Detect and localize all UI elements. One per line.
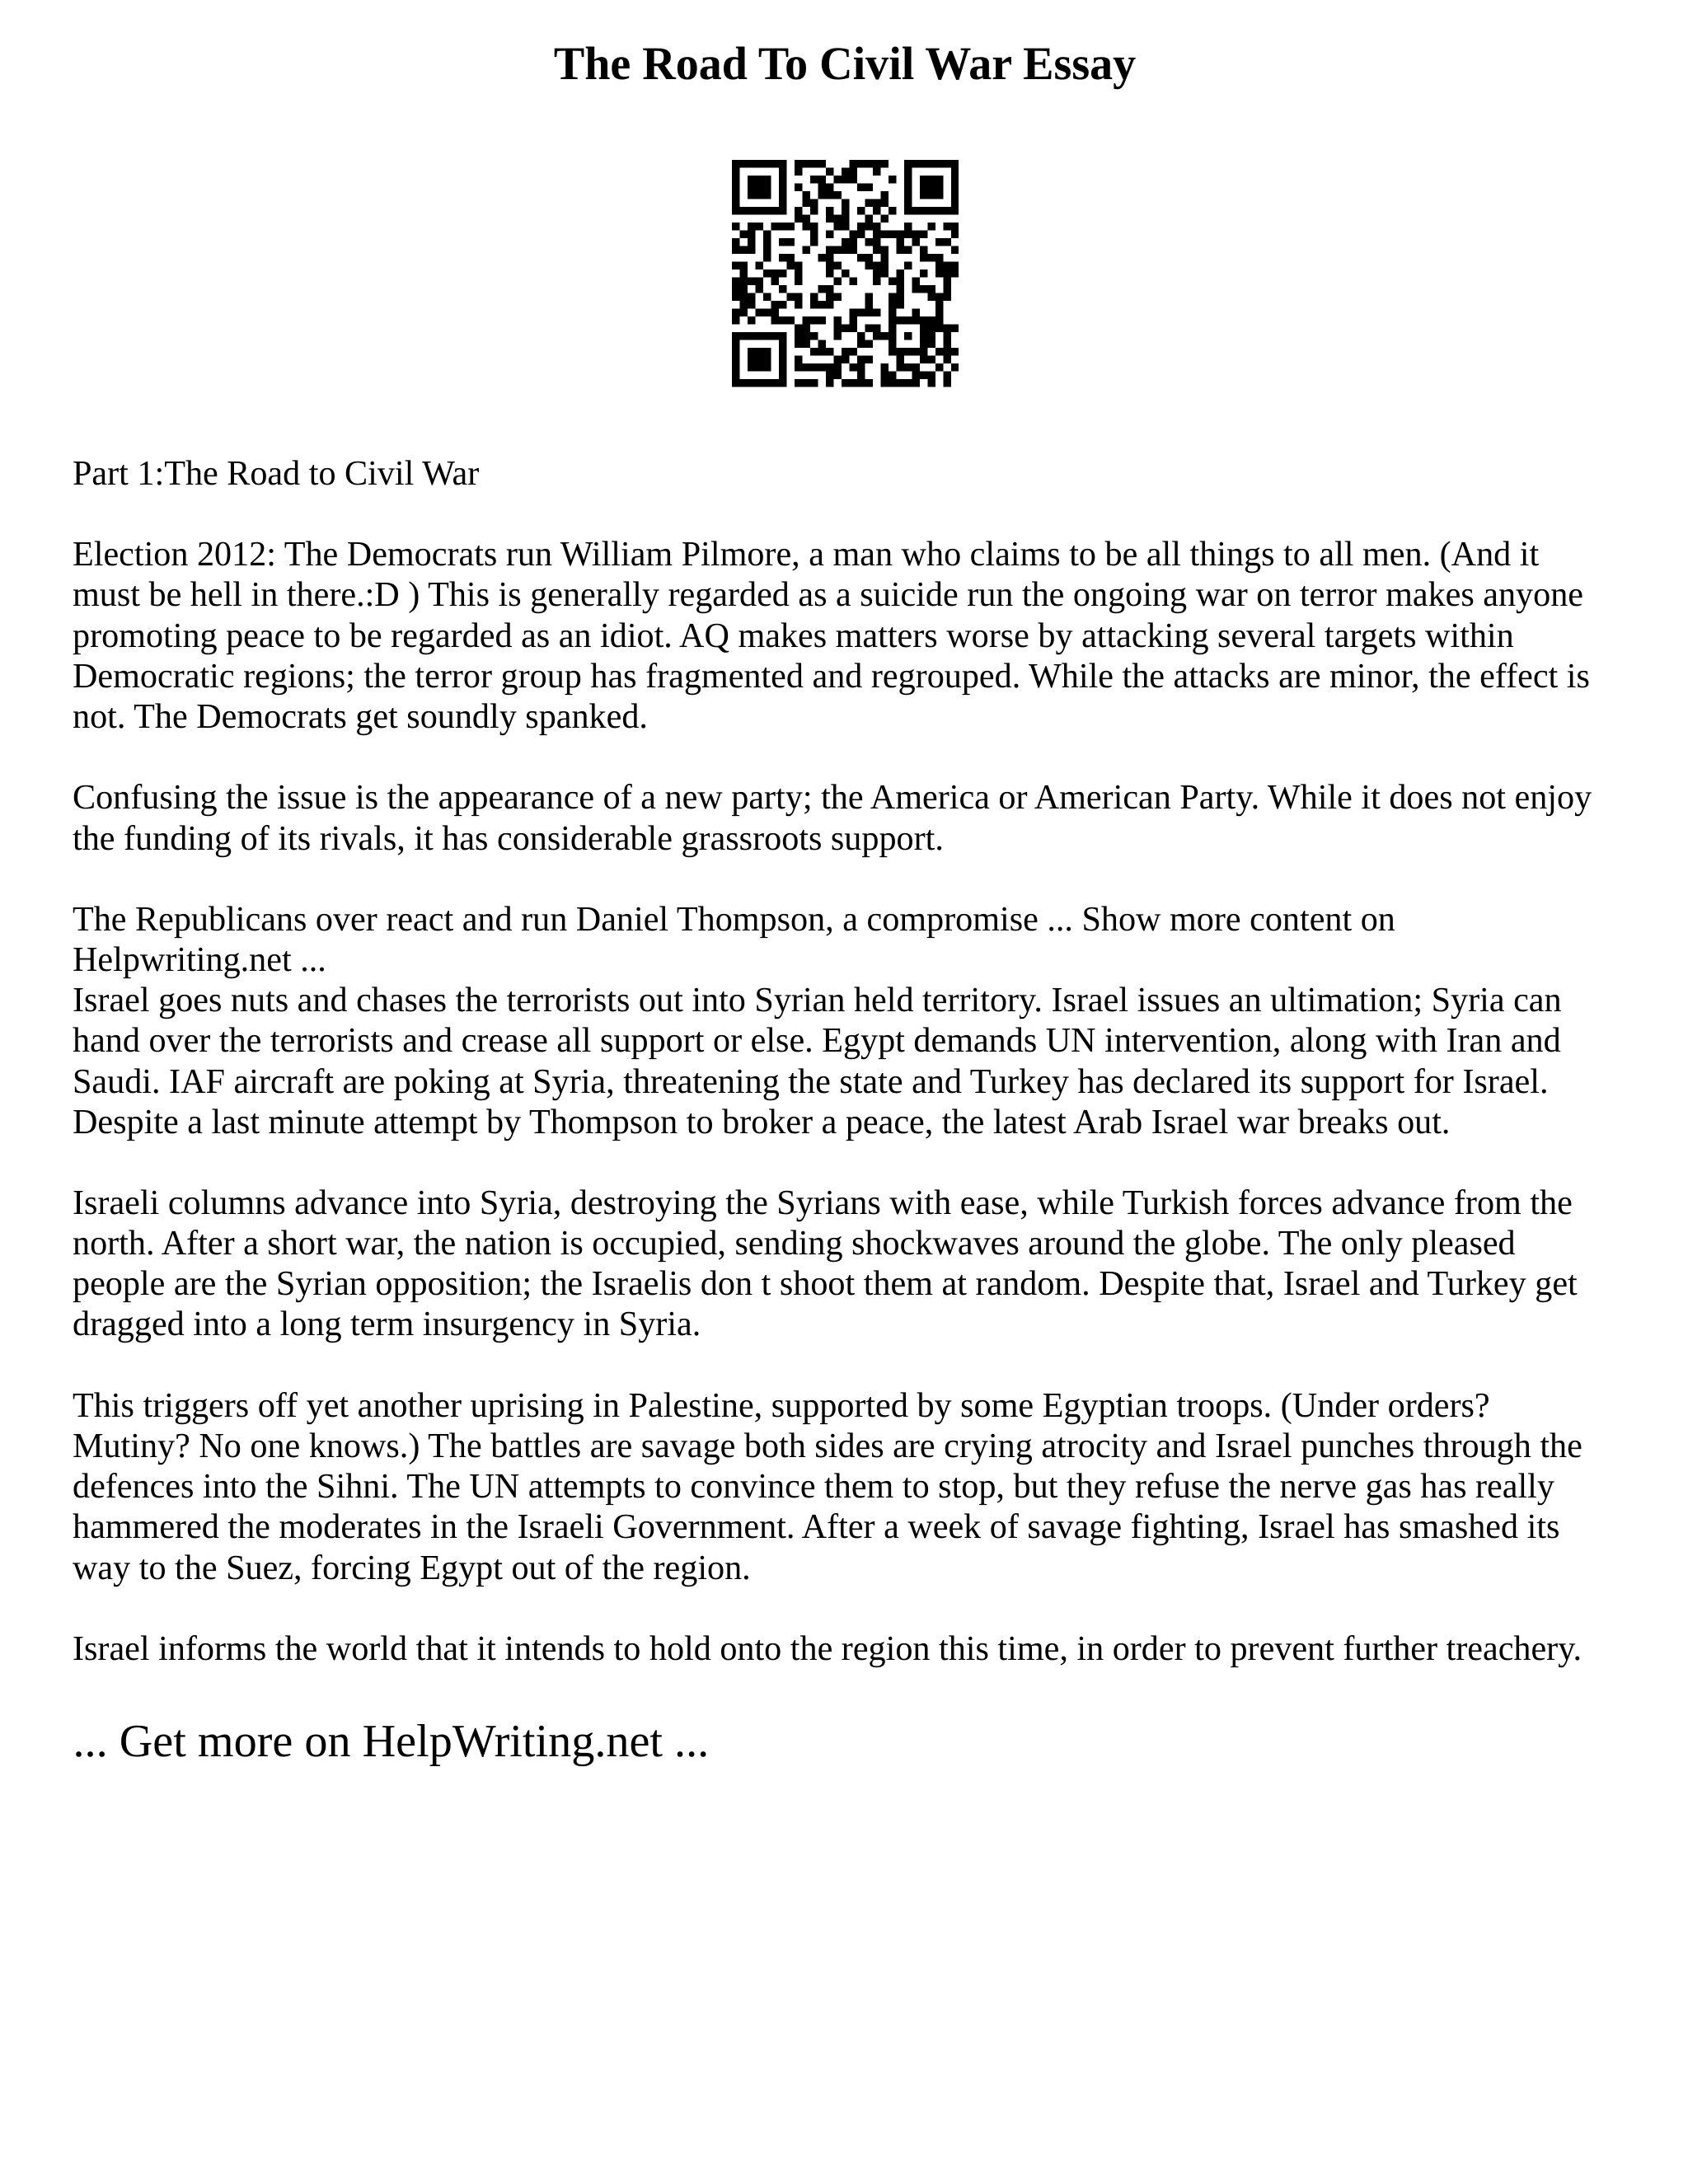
text block: election 2012: not. The Democrats get soundly spanked. <box>73 697 648 736</box>
text block: election 2012: Democratic regions; the terror group has fragmented and regrouped. While the attacks are minor, the effect is <box>73 657 1590 696</box>
text block: palestine uprising: way to the Suez, forcing Egypt out of the region. <box>73 1549 751 1587</box>
text block: republicans <box>73 900 1395 979</box>
text block: new party: Confusing the issue is the appearance of a new party; the America or American Party. While it does not enjoy <box>73 778 1592 817</box>
text block: palestine uprising: Mutiny? No one knows.) The battles are savage both sides are crying atrocity and Israel punches through the <box>73 1427 1582 1465</box>
text block: election 2012 <box>73 535 1590 736</box>
text block: israel ultimatum: Israel goes nuts and chases the terrorists out into Syrian held territory. Israel issues an ultimation; Syria can <box>73 981 1562 1019</box>
text block: palestine uprising: hammered the moderates in the Israeli Government. After a week of savage fighting, Israel has smashed its <box>73 1507 1560 1546</box>
title: The Road To Civil War Essay <box>554 38 1136 90</box>
text block: new party: the funding of its rivals, it has considerable grassroots support. <box>73 819 944 858</box>
text block: israel ultimatum: hand over the terrorists and crease all support or else. Egypt demands UN intervention, along with Iran and <box>73 1021 1561 1060</box>
text block: election 2012: must be hell in there.:D ) This is generally regarded as a suicide run the ongoing war on terror makes anyone <box>73 575 1583 614</box>
text block: palestine uprising: defences into the Sihni. The UN attempts to convince them to stop, but they refuse the nerve gas has really <box>73 1467 1554 1506</box>
text block: new party <box>73 778 1592 858</box>
text block: israeli columns: Israeli columns advance into Syria, destroying the Syrians with ease, while Turkish forces advance from the <box>73 1183 1573 1222</box>
text block: israeli columns: people are the Syrian opposition; the Israelis don t shoot them at random. Despite that, Israel and Turkey get <box>73 1264 1578 1303</box>
text block: palestine uprising <box>73 1386 1582 1587</box>
text block: israeli columns: north. After a short war, the nation is occupied, sending shockwaves around the globe. The only pleased <box>73 1224 1516 1263</box>
text block: republicans: The Republicans over react and run Daniel Thompson, a compromise ... Show more content on <box>73 900 1395 939</box>
text block: israel ultimatum: Saudi. IAF aircraft are poking at Syria, threatening the state and Turkey has declared its support for Israel. <box>73 1062 1549 1101</box>
text block: election 2012: promoting peace to be regarded as an idiot. AQ makes matters worse by attacking several targets within <box>73 616 1514 655</box>
text block: israel ultimatum: Despite a last minute attempt by Thompson to broker a peace, the latest Arab Israel war breaks out. <box>73 1103 1451 1141</box>
icon: QR code <box>732 160 959 387</box>
text block: republicans: Helpwriting.net ... <box>73 940 326 979</box>
text block: palestine uprising: This triggers off yet another uprising in Palestine, supported by some Egyptian troops. (Under orders? <box>73 1386 1490 1425</box>
text block: israeli columns <box>73 1183 1578 1343</box>
text block: israeli columns: dragged into a long term insurgency in Syria. <box>73 1305 701 1343</box>
text block: israel holds region: Israel informs the world that it intends to hold onto the region this time, in order to prevent further treachery. <box>73 1629 1582 1668</box>
heading: part 1: Part 1:The Road to Civil War <box>73 454 480 493</box>
text block: israel ultimatum <box>73 981 1562 1141</box>
call to action: ... Get more on HelpWriting.net ... <box>73 1716 709 1767</box>
text block: election 2012: Election 2012: The Democrats run William Pilmore, a man who claims to be all things to all men. (And it <box>73 535 1540 574</box>
